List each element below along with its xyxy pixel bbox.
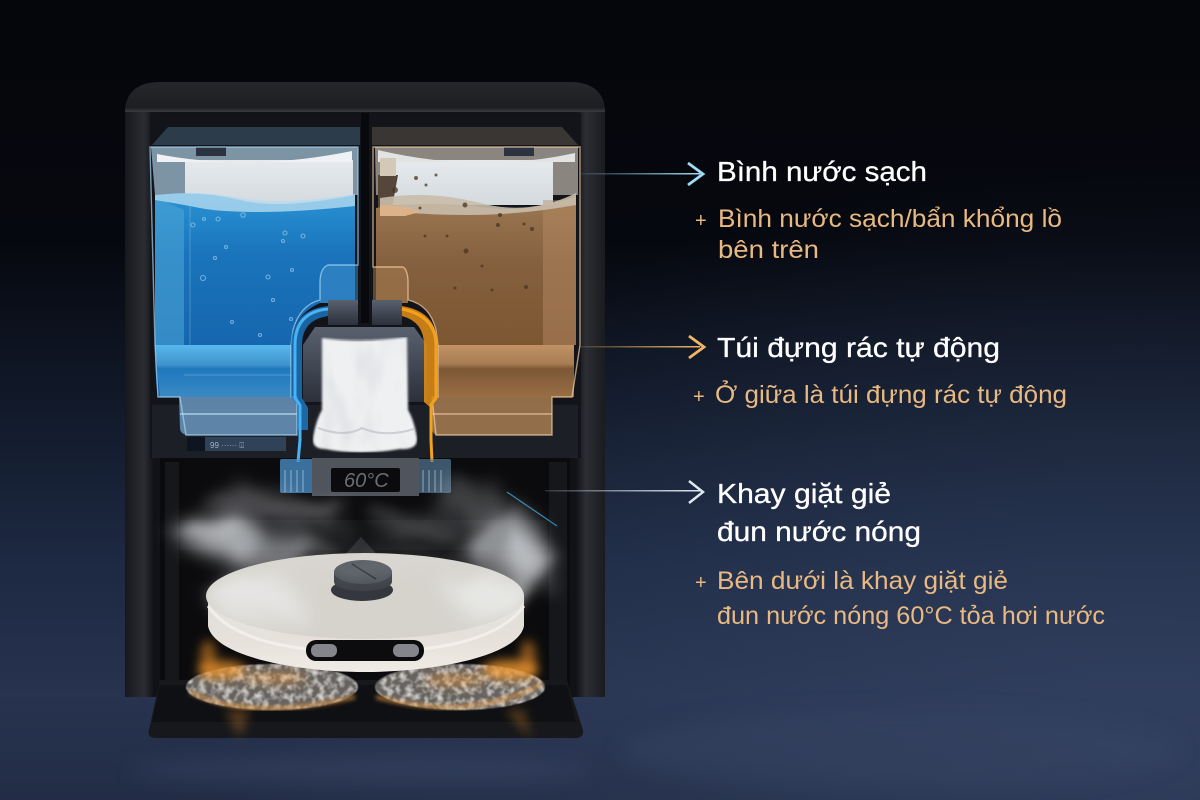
callout: washing tray	[695, 478, 1105, 630]
bag gather	[318, 428, 414, 433]
water	[155, 193, 355, 397]
panel: clean water tank	[150, 127, 360, 435]
tank lid	[372, 127, 578, 145]
orange heat glow	[198, 660, 538, 738]
heater unit with 60°C display	[280, 458, 451, 496]
temperature display	[331, 468, 400, 492]
blue heater side blocks	[280, 459, 451, 493]
lower tank band	[155, 345, 292, 397]
bubbles	[191, 213, 305, 336]
callout: dust bag	[693, 332, 1067, 409]
water highlight	[155, 197, 184, 345]
robot body	[208, 596, 524, 672]
lower cavity	[160, 458, 570, 693]
tube inset	[320, 265, 358, 303]
tank outline	[150, 147, 358, 435]
bag	[313, 337, 417, 452]
tank outline	[373, 147, 580, 435]
heading: Khay giặt giẻ	[717, 478, 891, 509]
steam behind robot	[183, 484, 554, 589]
sensor window	[306, 640, 424, 661]
description: đun nước nóng 60°C tỏa hơi nước	[717, 602, 1105, 630]
front steam	[213, 550, 528, 622]
bubbles	[392, 174, 534, 292]
upper compartment	[150, 113, 581, 458]
housing	[303, 327, 427, 402]
heading: Bình nước sạch	[717, 156, 927, 187]
foam surface	[380, 193, 576, 215]
description: bên trên	[718, 236, 819, 264]
description: Ở giữa là túi đựng rác tự động	[715, 379, 1067, 409]
white interior	[185, 160, 353, 205]
heading: Túi đựng rác tự động	[717, 332, 1000, 363]
station lid	[125, 82, 605, 112]
description: Bên dưới là khay giặt giẻ	[717, 567, 1008, 595]
description: +	[695, 572, 707, 594]
lidar turret	[331, 560, 393, 601]
glass top	[375, 147, 578, 195]
orange tube	[402, 309, 436, 462]
mop glow edges	[190, 684, 542, 708]
lower tray	[179, 397, 297, 435]
orange tube glow	[402, 306, 437, 408]
status strip	[187, 437, 286, 451]
connector blocks	[328, 300, 402, 325]
robot vacuum	[206, 553, 524, 672]
lower tray	[432, 397, 552, 435]
blue tube	[295, 309, 328, 462]
lower tank band	[438, 345, 574, 397]
shelf behind trays	[152, 405, 578, 458]
white interior	[383, 160, 553, 205]
docking station	[125, 82, 605, 697]
tube inset	[373, 267, 408, 303]
callout: clean water tank	[695, 156, 1062, 264]
description: Bình nước sạch/bẩn khổng lồ	[718, 205, 1062, 233]
status strip: 99 ······ ⍗	[210, 441, 244, 450]
description: +	[693, 386, 705, 408]
robot top	[206, 553, 524, 639]
left mop	[186, 664, 358, 710]
dirty water	[376, 196, 576, 345]
glass top	[151, 147, 358, 195]
right mop	[375, 664, 545, 710]
arrow: clean water tank callout	[580, 163, 703, 185]
tank lid	[152, 127, 360, 145]
auto dust bag assembly	[291, 113, 437, 462]
tray	[149, 680, 583, 738]
arrow: washing tray callout	[545, 481, 703, 503]
temperature display: 60°C	[344, 470, 389, 492]
panel: dirty water tank	[372, 127, 580, 435]
heading: đun nước nóng	[717, 516, 921, 547]
arrow: dust bag callout	[580, 336, 704, 358]
dirty residue	[378, 175, 398, 208]
blue tube glow	[291, 306, 328, 430]
heater box	[312, 458, 419, 496]
station body	[125, 112, 605, 697]
mop pads	[186, 664, 545, 710]
thin blue diagonal	[507, 492, 557, 526]
flames behind robot	[200, 640, 536, 676]
description: +	[695, 210, 707, 232]
flames and steam front	[198, 550, 538, 738]
